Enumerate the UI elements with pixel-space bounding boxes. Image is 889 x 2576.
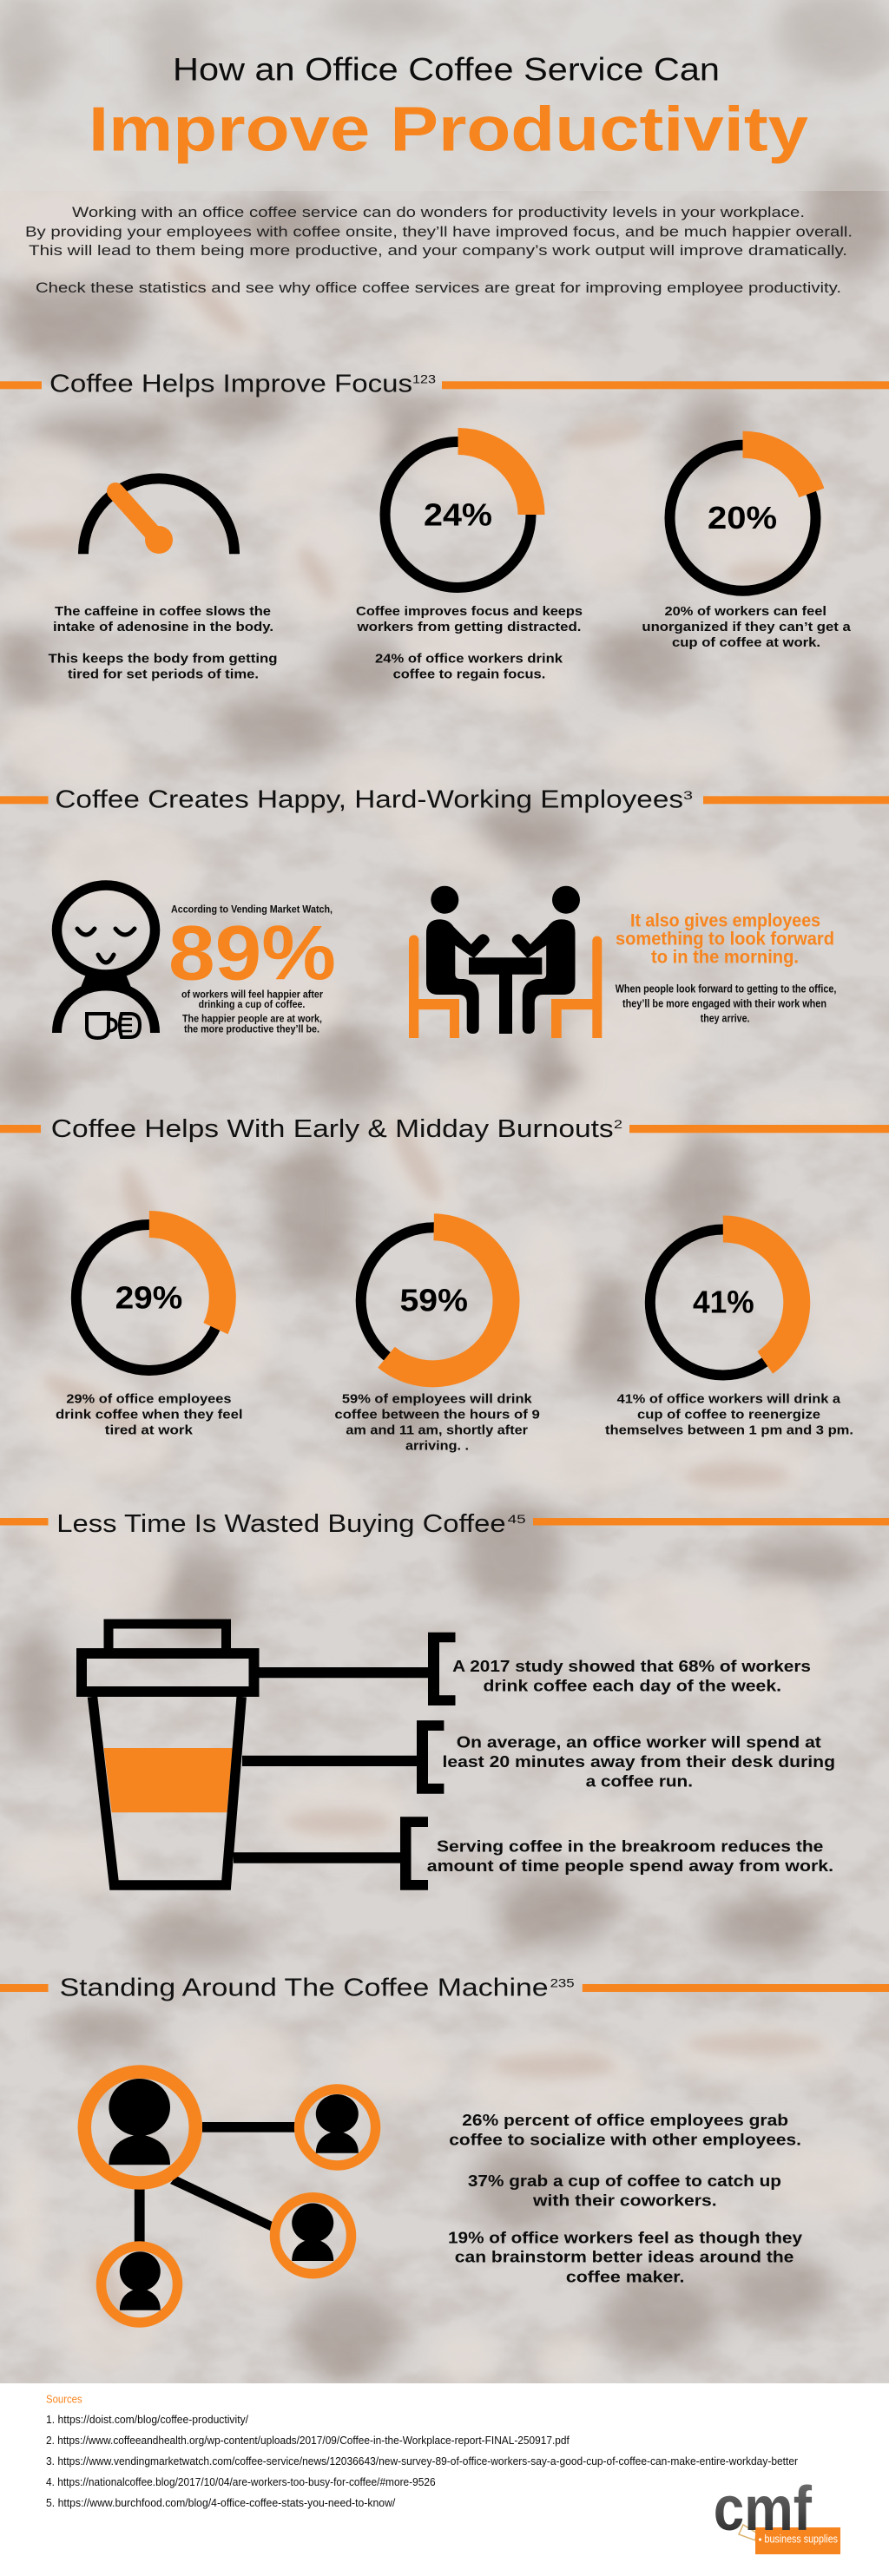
text: 20 minutes away: a coffee run. <box>586 1772 693 1790</box>
heading: Standing Around The Coffee Machine: 235 <box>550 1975 575 1989</box>
stat: 89% happier: 89% <box>168 909 336 996</box>
intro text: Working with an office coffee service can do wonders for productivity levels in your workplace. <box>72 204 805 220</box>
stat: 89% happier: the more productive they’ll be. <box>184 1022 319 1035</box>
heading: Coffee Helps With Early & Midday Burnouts: Coffee Helps With Early & Midday Burnouts <box>51 1115 614 1143</box>
donut chart: 41% <box>650 1229 797 1375</box>
sources list: 4. https://nationalcoffee.blog/2017/10/04/are-workers-too-busy-for-coffee/#more-9526 <box>46 2476 436 2488</box>
caption: caffeine <box>49 604 278 681</box>
connector bracket 3 <box>234 1817 428 1890</box>
heading: Standing Around The Coffee Machine: Standing Around The Coffee Machine <box>60 1974 549 2001</box>
caption: 29%: 29% of office employees <box>66 1392 232 1407</box>
caption: 20%: 20% of workers can feel <box>665 604 826 619</box>
callout: look forward: When people look forward to getting to the office, <box>616 983 836 996</box>
diagram: people network <box>84 2072 376 2323</box>
sources list: 3. https://www.vendingmarketwatch.com/coffee-service/news/12036643/new-survey-89-of-office-workers-say-a-good-cup-of-coffee-can-make-entire-workday-better <box>46 2455 798 2468</box>
heading: Coffee Helps Improve Focus <box>0 371 889 398</box>
donut chart: 41%: 41% <box>693 1284 754 1319</box>
donut chart: 24%: 24% <box>424 497 492 533</box>
heading: Coffee Creates Happy, Hard-Working Employees <box>0 786 889 814</box>
donut chart: 29% <box>76 1224 222 1370</box>
caption: 41%: 41% of office workers will drink a <box>617 1392 841 1407</box>
heading: Less Time Is Wasted Buying Coffee: 45 <box>508 1512 526 1526</box>
caption: 41%: cup of coffee to reenergize <box>637 1408 820 1423</box>
text: serving coffee in breakroom <box>427 1837 833 1875</box>
icon: takeaway coffee cup <box>82 1624 254 1885</box>
caption: caffeine: tired for set periods of time. <box>68 667 259 681</box>
heading: Less Time Is Wasted Buying Coffee <box>0 1510 889 1538</box>
caption: caffeine: This keeps the body from getting <box>49 651 278 666</box>
text: socializing stats: coffee to socialize with other employees. <box>449 2132 801 2149</box>
intro text: Check these statistics and see why office coffee services are great for improving employee productivity. <box>36 279 841 296</box>
caption: 59%: am and 11 am, shortly after <box>346 1423 528 1438</box>
sources list: 5. https://www.burchfood.com/blog/4-office-coffee-stats-you-need-to-know/ <box>46 2497 396 2509</box>
text: socializing stats: 26% percent of office employees grab <box>462 2112 788 2129</box>
callout: look forward: It also gives employees <box>630 910 820 930</box>
text: 20 minutes away: least 20 minutes away from their desk during <box>443 1753 835 1771</box>
donut chart: 59% <box>361 1227 507 1374</box>
caption: 41% <box>605 1392 853 1438</box>
text: 68% of workers: drink coffee each day of the week. <box>483 1677 781 1694</box>
text: serving coffee in breakroom: Serving coffee in the breakroom reduces the <box>437 1837 823 1855</box>
logo: cmf business supplies: business supplies <box>764 2532 838 2545</box>
heading: Coffee Helps With Early & Midday Burnouts <box>0 1115 889 1143</box>
donut chart: 20% <box>670 444 816 591</box>
heading: Coffee Helps Improve Focus: 123 <box>412 372 436 386</box>
caption: caffeine: The caffeine in coffee slows the <box>55 604 271 619</box>
callout: look forward <box>616 910 836 1025</box>
connector bracket 2 <box>242 1720 444 1794</box>
heading: Standing Around The Coffee Machine <box>0 1974 889 2001</box>
caption: 20% <box>642 604 852 650</box>
caption: 59%: 59% of employees will drink <box>342 1392 532 1407</box>
stat: 89% happier <box>168 904 336 1035</box>
title: Improve Productivity <box>89 95 808 164</box>
connector bracket 1 <box>259 1633 455 1705</box>
caption: 24%: coffee to regain focus. <box>393 667 545 681</box>
donut chart: 59%: 59% <box>399 1283 468 1318</box>
caption: 41%: themselves between 1 pm and 3 pm. <box>605 1423 853 1438</box>
text: socializing stats <box>448 2112 802 2285</box>
caption: 29%: tired at work <box>105 1423 194 1438</box>
caption: 59%: arriving. . <box>405 1439 469 1454</box>
caption: 20%: cup of coffee at work. <box>672 635 820 650</box>
sources list <box>46 2392 798 2509</box>
text: 20 minutes away <box>443 1733 835 1790</box>
caption: 59%: coffee between the hours of 9 <box>334 1408 540 1423</box>
caption: 29%: drink coffee when they feel <box>56 1408 243 1423</box>
text: 68% of workers <box>452 1658 811 1694</box>
text: socializing stats: with their coworkers. <box>532 2192 717 2210</box>
caption: 24%: Coffee improves focus and keeps <box>356 604 583 619</box>
logo: cmf business supplies: cmf <box>714 2474 813 2544</box>
sources list: 2. https://www.coffeeandhealth.org/wp-content/uploads/2017/09/Coffee-in-the-Workplace-report-FINAL-250917.pdf <box>46 2435 570 2447</box>
caption: caffeine: intake of adenosine in the body. <box>53 620 273 634</box>
sources list: Sources <box>46 2392 82 2405</box>
text: socializing stats: 19% of office workers feel as though they <box>448 2229 802 2246</box>
stat: 89% happier: The happier people are at work, <box>182 1013 322 1025</box>
caption: 24%: workers from getting distracted. <box>356 620 582 634</box>
icon: happy person with coffee cups <box>57 885 155 1038</box>
callout: look forward: they’ll be more engaged with their work when <box>622 998 826 1010</box>
icon: two people at table <box>409 886 602 1038</box>
callout: look forward: something to look forward <box>616 929 834 949</box>
title: How an Office Coffee Service Can <box>173 52 720 88</box>
stat: 89% happier: drinking a cup of coffee. <box>199 998 305 1010</box>
callout: look forward: they arrive. <box>701 1013 750 1025</box>
footer white panel <box>0 2383 889 2576</box>
stat: 89% happier: According to Vending Market Watch, <box>171 904 333 916</box>
stat: 89% happier: of workers will feel happier after <box>181 988 323 1000</box>
text: serving coffee in breakroom: amount of time people spend away from work. <box>427 1857 833 1875</box>
intro text: By providing your employees with coffee onsite, they’ll have improved focus, and be much happier overall. <box>25 224 853 240</box>
caption: 59% <box>334 1392 540 1454</box>
callout: look forward: to in the morning. <box>651 947 799 967</box>
text: socializing stats: coffee maker. <box>566 2268 684 2285</box>
icon: gauge <box>83 478 234 554</box>
donut chart: 24% <box>385 441 531 588</box>
heading: Coffee Helps With Early & Midday Burnouts: 2 <box>614 1117 622 1131</box>
caption: 20%: unorganized if they can’t get a <box>642 620 852 634</box>
heading: Coffee Creates Happy, Hard-Working Employees: Coffee Creates Happy, Hard-Working Employees <box>55 786 683 814</box>
intro text <box>25 204 853 296</box>
text: 68% of workers: A 2017 study showed that 68% of workers <box>452 1658 811 1675</box>
text: socializing stats: 37% grab a cup of coffee to catch up <box>468 2172 781 2190</box>
donut chart: 29%: 29% <box>115 1279 182 1315</box>
heading: Coffee Creates Happy, Hard-Working Employees: 3 <box>683 788 693 802</box>
sources list: 1. https://doist.com/blog/coffee-productivity/ <box>46 2414 249 2426</box>
caption: 29% <box>56 1392 243 1438</box>
caption: 24% <box>356 604 583 681</box>
text: 20 minutes away: On average, an office worker will spend at <box>457 1733 821 1751</box>
heading: Coffee Helps Improve Focus: Coffee Helps Improve Focus <box>49 371 412 398</box>
intro text: This will lead to them being more productive, and your company’s work output will improve dramatically. <box>29 242 847 259</box>
heading: Less Time Is Wasted Buying Coffee: Less Time Is Wasted Buying Coffee <box>56 1510 506 1538</box>
caption: 24%: 24% of office workers drink <box>375 651 563 666</box>
title <box>89 52 808 164</box>
text: socializing stats: can brainstorm better ideas around the <box>455 2249 794 2266</box>
donut chart: 20%: 20% <box>708 500 777 536</box>
